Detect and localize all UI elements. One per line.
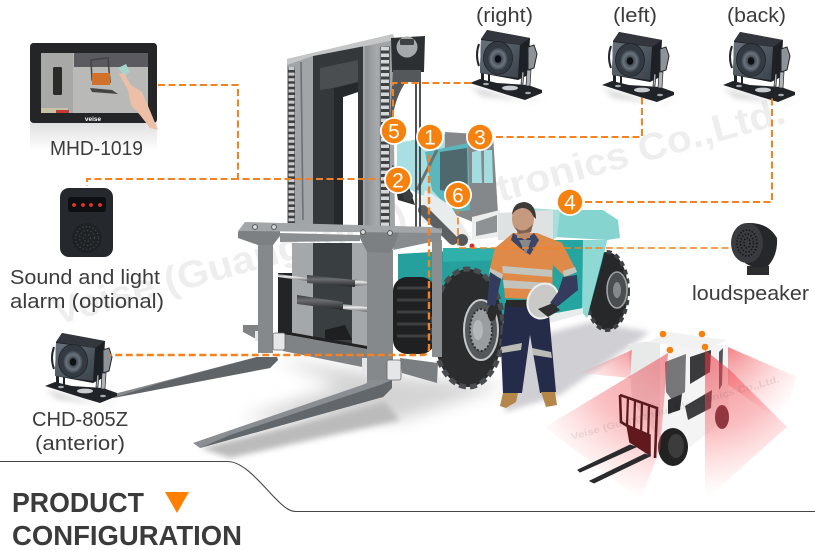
speaker front [731,223,763,263]
label line one: Sound and light [10,267,160,289]
line: badge 3 to left camera [496,97,642,137]
badge 5 [380,117,408,145]
label left: (left) [613,5,657,27]
camera: back [723,32,799,104]
line: monitor and alarm to badge 2 [87,85,380,186]
reflective strips [489,266,577,290]
left tab [243,325,258,340]
back camera [723,5,799,104]
lower cross bar [283,331,367,349]
front tyres [393,269,503,387]
brand: veise [85,116,102,123]
left sleeve and glove [487,272,501,321]
ground shadows [200,322,650,458]
hand [119,73,158,130]
monitor screen [41,53,148,113]
badge 2: 2 [392,170,404,192]
right sleeve and glove [538,275,578,317]
orange camera markers [660,331,708,353]
trousers [501,303,556,393]
label: loudspeaker [692,283,809,305]
badge 6: 6 [452,184,464,208]
line: badge 4 to back camera [585,97,772,202]
footer divider line [0,462,815,512]
watermark: Veise (Guangzhou) Electronics Co.,Ltd. [48,91,790,334]
boots [500,392,557,408]
label position: (anterior) [35,433,125,455]
top beam [280,233,360,242]
left camera [602,5,678,104]
line: badge 6 to loudspeaker [458,207,730,248]
alarm red LEDs [72,203,102,207]
icon: orange down triangle [165,492,189,513]
loudspeaker [692,223,809,305]
heading line one: PRODUCT [12,487,144,518]
line: badge 1 to anterior camera [110,155,429,355]
label back: (back) [727,5,786,27]
badge 3: 3 [474,126,486,150]
label line two: alarm (optional) [10,291,164,313]
lift chains [292,47,385,227]
badge 6 [444,181,472,209]
hi-vis shirt [490,233,577,300]
badge 4: 4 [564,192,576,214]
badge 2 [384,166,412,194]
lower mast [292,243,313,336]
small forks [578,445,650,483]
small forklift with camera coverage [545,331,797,500]
mast [287,34,425,229]
monitor reflection [30,123,157,151]
left fork [110,357,278,398]
uprights [258,240,273,353]
small truck body [628,332,729,466]
label right: (right) [476,5,533,27]
badge 4 [556,188,584,216]
alarm light window [68,197,106,212]
badge 3 [466,123,494,151]
speaker housing [745,223,777,267]
alarm body [60,188,113,257]
badge 1 [416,123,444,151]
teal body [398,208,620,332]
collar and undershirt [511,233,539,255]
line: badge 5 to right camera [393,83,472,117]
camera: right [470,30,546,102]
small carriage [620,395,657,458]
red camera zones [545,347,797,500]
cab [397,132,553,248]
label: MHD-1019 [50,138,143,160]
hydraulic cylinders [278,274,367,312]
bracket [747,266,769,275]
rear wheel [586,252,628,330]
main forklift [110,34,650,458]
number badges [380,117,584,216]
carriage bolts [253,225,392,235]
badge 5: 5 [388,120,400,144]
camera: anterior [45,333,121,405]
connection lines [87,83,772,355]
small watermark: Veise (Guangzhou) Electronics Co.,Ltd. [570,374,781,443]
alarm [10,188,164,313]
heading: product configuration [12,487,242,550]
label model: CHD-805Z [32,409,128,431]
badge 1: 1 [424,126,436,150]
small inner tyre [278,273,292,335]
chrome bolts [255,331,401,380]
camera: left [602,32,678,104]
worker [487,202,578,408]
monitor bezel [30,43,157,123]
monitor MHD-1019 [30,43,158,160]
helmet [522,278,564,324]
anterior camera [32,333,128,455]
head [512,202,536,238]
fork carriage [238,222,442,390]
alarm speaker grille [72,223,102,253]
speaker holes [737,230,757,256]
belt [506,300,538,307]
right fork [193,380,392,448]
right camera [470,5,546,102]
pulley and rods [390,36,425,227]
